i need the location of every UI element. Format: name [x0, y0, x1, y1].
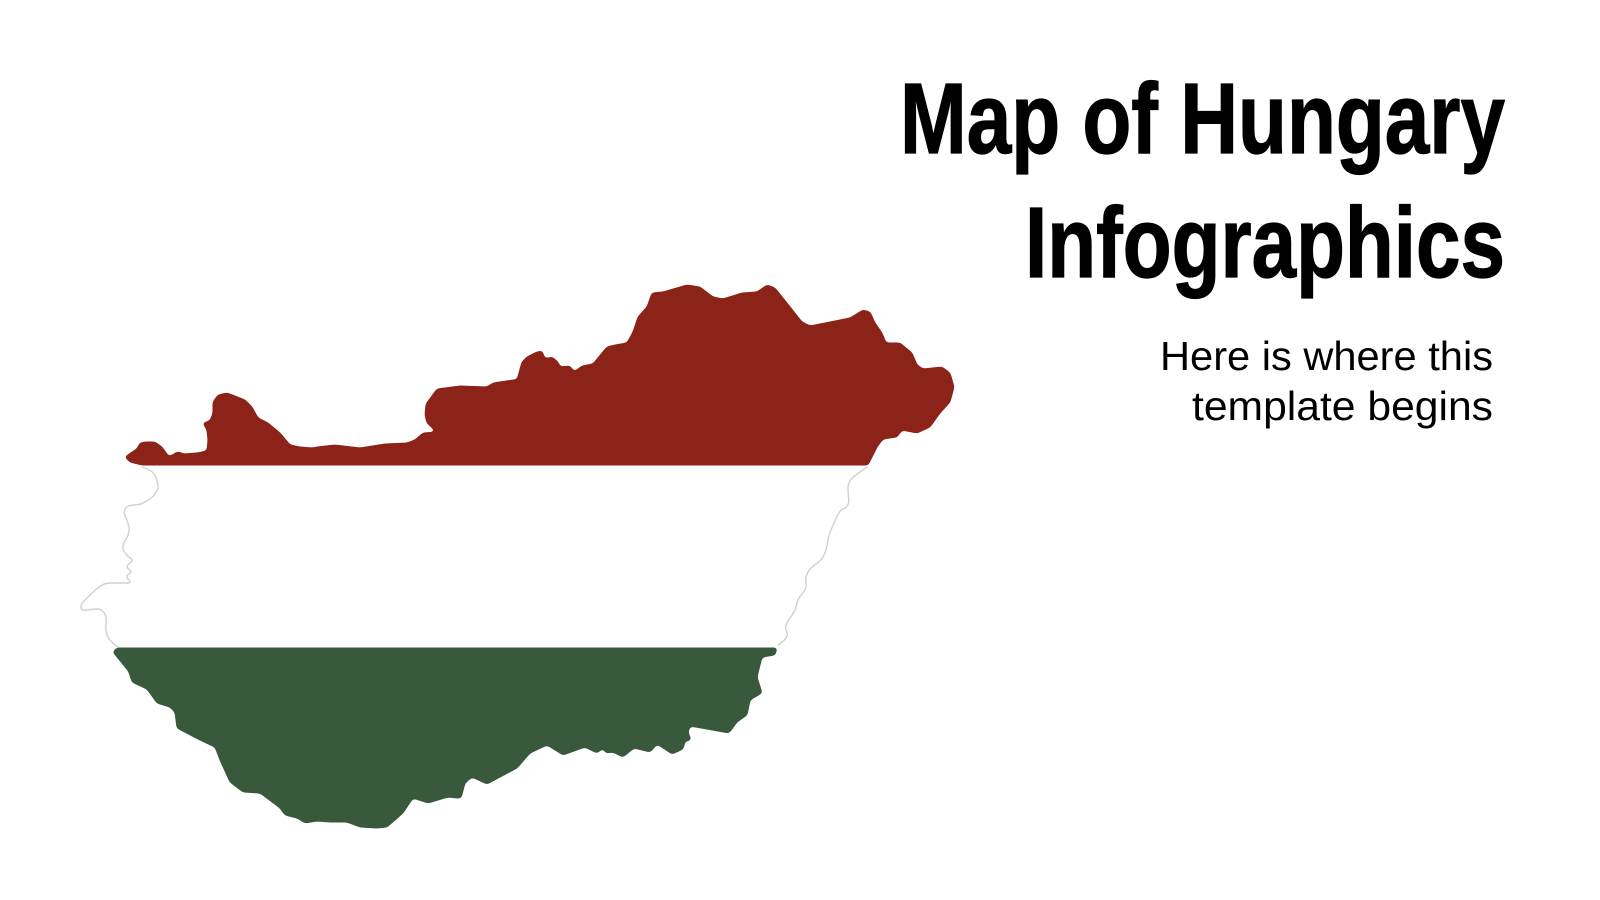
map band: green — [113, 648, 777, 828]
map band: white with grey outline, left edge — [81, 467, 158, 647]
map band: red — [125, 285, 954, 465]
subtitle: template begins — [1192, 383, 1493, 429]
title — [900, 63, 1505, 299]
subtitle — [1160, 333, 1493, 429]
subtitle: Here is where this — [1160, 333, 1493, 379]
map band: white with grey outline, right edge — [778, 467, 867, 645]
map of Hungary in flag colours — [81, 285, 954, 828]
